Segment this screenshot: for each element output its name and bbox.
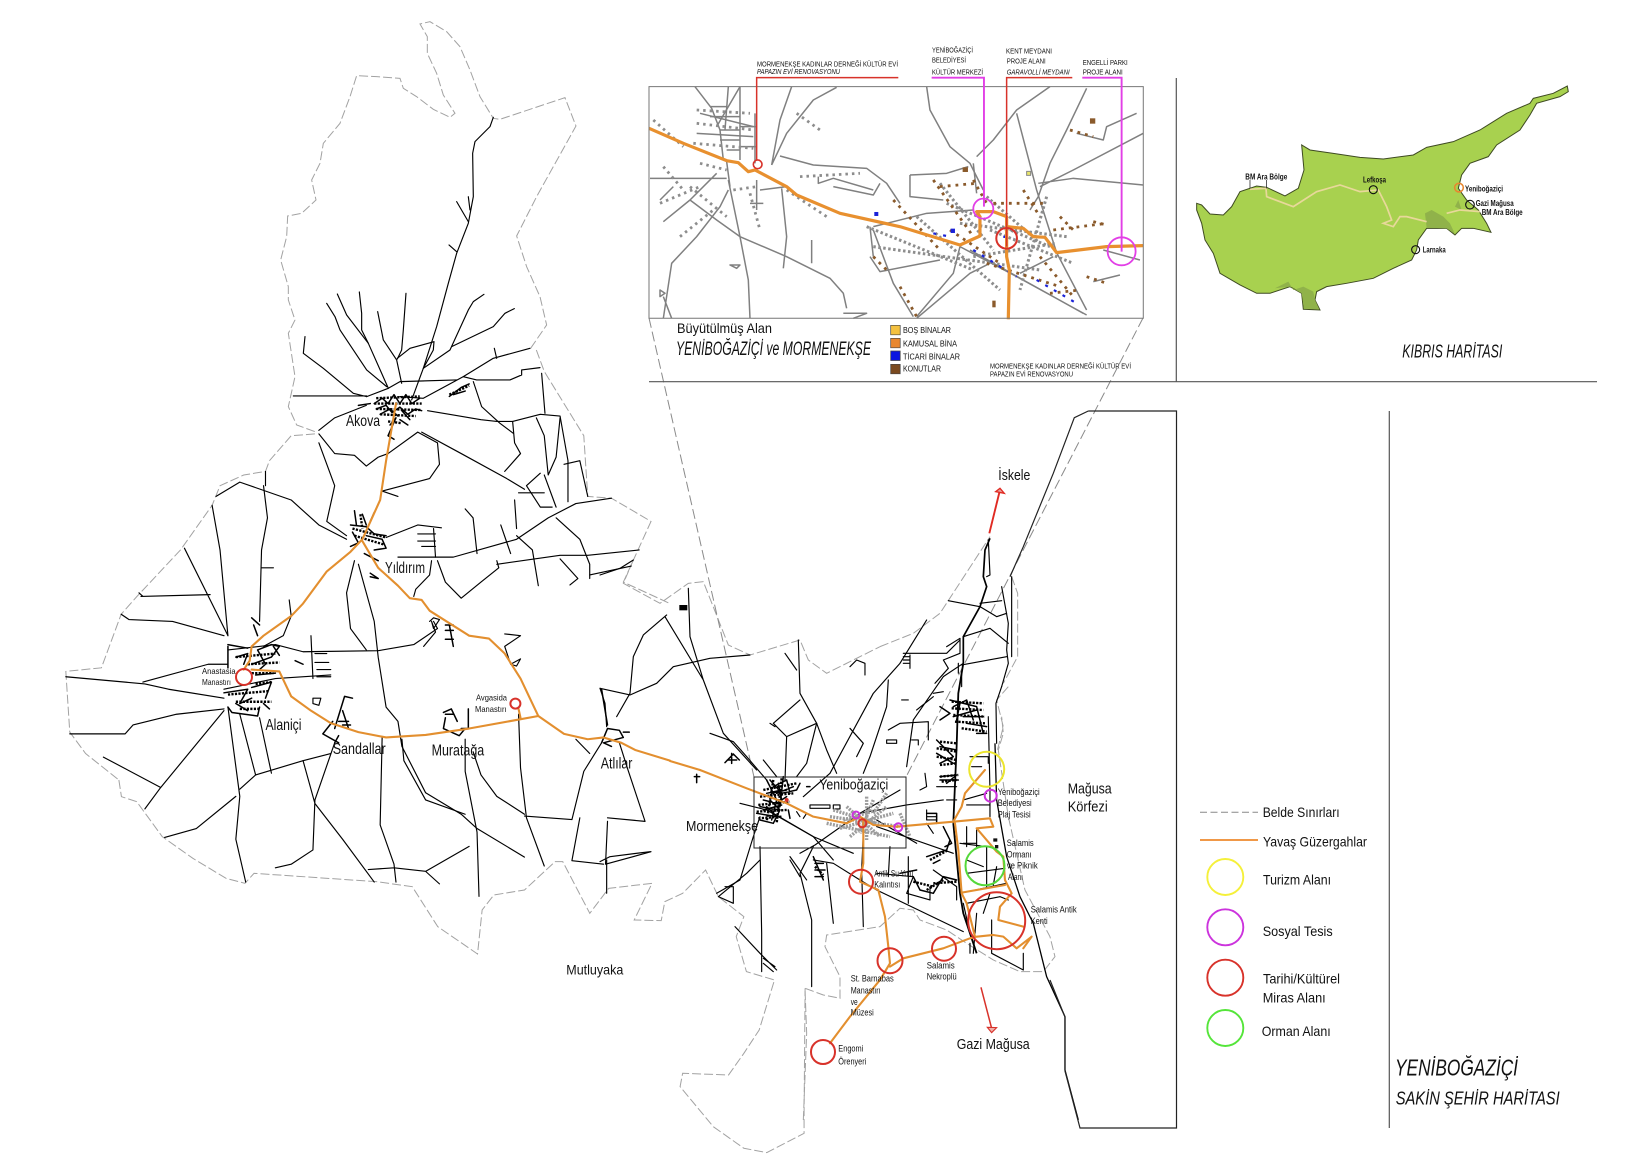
label: Akova: Akova — [346, 413, 380, 430]
label: St. Barnabas Manastırı ve Müzesi — [851, 974, 894, 1018]
inset caption: Kültür Merkezi: YENİBOĞAZİÇİ — [932, 46, 973, 55]
label: Mağusa Körfezi: Körfezi — [1068, 799, 1108, 816]
label: Yeniboğaziçi: Yeniboğaziçi — [819, 776, 888, 793]
village clusters: Akova, Yıldırım, Alaniçi, Sandallar, Muratağa, Atlılar — [224, 384, 629, 746]
inset frame — [649, 87, 1143, 318]
legend: Orman Alanı — [1207, 1010, 1331, 1046]
route link between Atlılar and Mormenekşe — [670, 761, 700, 770]
leader line: Kültür Merkezi — [932, 78, 993, 219]
label: Avgasida Manastırı: Avgasida — [476, 693, 507, 703]
label: Salamis Nekroplü: Salamis — [927, 960, 955, 970]
arrow: to İskele — [989, 488, 1004, 533]
label: Salamis Antik Kenti: Kenti — [1031, 916, 1048, 926]
label: Salamis Antik Kenti — [1031, 905, 1077, 926]
label: Anastasia Manastırı — [202, 666, 236, 687]
label: St. Barnabas Manastırı ve Müzesi: Manastırı — [851, 985, 881, 995]
label: Antik Su Yolu Kalıntısı: Kalıntısı — [874, 880, 900, 890]
label: Yeniboğaziçi Belediyesi Plaj Tesisi: Yeniboğaziçi — [998, 787, 1040, 797]
label: Salamis Nekroplü — [927, 960, 957, 981]
road network: Salamis and south-east — [700, 743, 1078, 1120]
British bases darker patches — [1275, 200, 1462, 309]
road network: north and Akova — [293, 117, 545, 433]
label: Salamis Nekroplü: Nekroplü — [927, 971, 957, 981]
title: Yeniboğaziçi Sakin Şehir Haritası: YENİBOĞAZİÇİ — [1395, 1055, 1518, 1081]
label: Salamis Ormanı ve Piknik Alanı: Salamis — [1007, 838, 1034, 848]
label: Mormenekşe: Mormenekşe — [686, 818, 758, 835]
inset caption: Engelli Parkı: PROJE ALANI — [1083, 67, 1123, 76]
legend: Belde Sınırları: Belde Sınırları — [1263, 804, 1340, 820]
inset caption: Papazın Evi — [757, 60, 898, 76]
label: St. Barnabas Manastırı ve Müzesi: Müzesi — [851, 1008, 874, 1018]
inset building footprints — [653, 110, 1107, 317]
inset caption: Engelli Parkı: ENGELLİ PARKI — [1083, 58, 1128, 67]
panel: main legend — [1200, 804, 1367, 1046]
label: Anastasia Manastırı: Manastırı — [202, 677, 231, 687]
inset caption: Papazın Evi: PAPAZIN EVİ RENOVASYONU — [757, 67, 841, 76]
heading: Kıbrıs Haritası: KIBRIS HARİTASI — [1402, 341, 1502, 361]
inset caption: Kültür Merkezi: BELEDİYESİ — [932, 56, 966, 65]
label: Atlılar: Atlılar — [601, 756, 633, 773]
label: Sandallar: Sandallar — [333, 741, 386, 758]
leader line: Engelli Parkı — [1082, 78, 1136, 265]
Cyprus label: Gazi Mağusa: Gazi Mağusa — [1476, 198, 1514, 208]
leader line: Kent Meydanı — [996, 78, 1072, 249]
label: Mutluyaka: Mutluyaka — [566, 962, 623, 978]
road network: central and coastal — [600, 560, 1002, 893]
UN buffer zone line — [1250, 185, 1480, 227]
legend: Tarihi/Kültürel Miras Alanı: Tarihi/Kültürel — [1263, 970, 1340, 986]
label: Anastasia Manastırı: Anastasia — [202, 666, 236, 676]
label: Engomi Örenyeri: Örenyeri — [838, 1056, 866, 1066]
label: Avgasida Manastırı — [475, 693, 507, 714]
inset caption: Kültür Merkezi: KÜLTÜR MERKEZİ — [932, 67, 983, 76]
arrow: to Gazi Mağusa — [981, 987, 997, 1033]
grey speckle of town centre — [827, 793, 910, 840]
label: Antik Su Yolu Kalıntısı — [874, 869, 913, 890]
label: Muratağa: Muratağa — [432, 742, 484, 759]
road network: west villages — [66, 384, 670, 896]
label: Avgasida Manastırı: Manastırı — [475, 704, 507, 714]
title: Yeniboğaziçi Sakin Şehir Haritası — [1395, 1055, 1560, 1108]
road network: İskele coast — [935, 538, 1012, 687]
inset building legend: KONUTLAR — [903, 365, 941, 374]
leader line: Papazın Evi — [753, 78, 898, 169]
label: Yeniboğaziçi Belediyesi Plaj Tesisi — [998, 787, 1040, 820]
inset footnote: MORMENEKŞE KADINLAR DERNEĞİ KÜLTÜR EVİ — [990, 362, 1131, 371]
inset caption: Papazın Evi: MORMENEKŞE KADINLAR DERNEĞİ KÜLTÜR EVİ — [757, 60, 898, 69]
label: Yıldırım: Yıldırım — [385, 560, 425, 577]
inset caption: Kent Meydanı — [1006, 46, 1070, 76]
Cyprus island shape — [1197, 86, 1568, 310]
slow routes: western loop — [244, 404, 670, 761]
projection lines from inset to main map rectangle — [649, 318, 1143, 777]
label: Salamis Ormanı ve Piknik Alanı: ve Piknik — [1007, 861, 1038, 871]
inset caption: Kent Meydanı: GARAVOLLİ MEYDANI — [1007, 67, 1070, 76]
legend: Sosyal Tesis: Sosyal Tesis — [1263, 923, 1333, 939]
inset marker buildings — [874, 118, 1095, 307]
inset heading: Büyütülmüş Alan: Büyütülmüş Alan — [677, 320, 772, 336]
Cyprus label: BM Ara Bölge east: BM Ara Bölge — [1482, 207, 1523, 217]
inset footnote — [990, 362, 1131, 379]
inset grey street network — [650, 87, 1143, 318]
label: Mağusa Körfezi: Mağusa — [1068, 780, 1112, 797]
inset footnote: PAPAZIN EVİ RENOVASYONU — [990, 370, 1073, 379]
Cyprus label: Lefkoşa: Lefkoşa — [1363, 175, 1386, 185]
panel: Cyprus map — [1197, 86, 1568, 310]
label: Yeniboğaziçi Belediyesi Plaj Tesisi: Belediyesi — [998, 798, 1032, 808]
inset building legend: KAMUSAL BİNA — [903, 340, 958, 349]
label: Gazi Mağusa: Gazi Mağusa — [957, 1036, 1030, 1053]
inset caption: Engelli Parkı — [1083, 58, 1128, 76]
inset building legend — [891, 325, 960, 374]
legend: Tarihi/Kültürel Miras Alanı: Miras Alanı — [1263, 989, 1326, 1005]
legend: Yavaş Güzergahlar: Yavaş Güzergahlar — [1263, 834, 1367, 850]
title: Yeniboğaziçi Sakin Şehir Haritası: SAKİN ŞEHİR HARİTASI — [1396, 1088, 1560, 1108]
label: Salamis Ormanı ve Piknik Alanı: Alanı — [1008, 872, 1023, 882]
municipal boundaries: dashed outline — [66, 22, 1055, 1153]
inset building legend: TİCARİ BİNALAR — [903, 352, 960, 361]
site circles on main map — [236, 669, 1025, 1064]
inset building legend: BOŞ BİNALAR — [903, 326, 951, 335]
label: Yeniboğaziçi Belediyesi Plaj Tesisi: Plaj Tesisi — [998, 810, 1031, 820]
Cyprus label: BM Ara Bölge west: BM Ara Bölge — [1245, 171, 1287, 181]
label: Alaniçi: Alaniçi — [266, 717, 302, 734]
enlarged area rectangle on main map — [754, 777, 906, 848]
Cyprus place markers — [1250, 180, 1474, 254]
village clusters: Mormenekşe and eastern shoreline — [694, 692, 990, 847]
label: Antik Su Yolu Kalıntısı: Antik Su Yolu — [874, 869, 913, 879]
inset heading: Yeniboğaziçi ve Mormenekşe: YENİBOĞAZİÇİ ve MORMENEKŞE — [676, 338, 871, 360]
label: Engomi Örenyeri: Engomi — [838, 1044, 863, 1054]
label: Salamis Ormanı ve Piknik Alanı — [1007, 838, 1038, 882]
label: Mağusa Körfezi — [1068, 780, 1112, 816]
label: Salamis Ormanı ve Piknik Alanı: Ormanı — [1007, 849, 1032, 859]
legend: Belde Sınırları — [1200, 804, 1340, 820]
slow routes: eastern network — [700, 770, 1032, 1043]
legend: Orman Alanı: Orman Alanı — [1262, 1023, 1331, 1039]
legend: Turizm Alanı — [1207, 859, 1331, 895]
inset slow route — [649, 128, 1143, 319]
Cyprus label: Yeniboğaziçi: Yeniboğaziçi — [1465, 184, 1503, 194]
legend: Turizm Alanı: Turizm Alanı — [1263, 872, 1331, 888]
inset caption: Kent Meydanı: PROJE ALANI — [1007, 56, 1046, 65]
label: St. Barnabas Manastırı ve Müzesi: St. Barnabas — [851, 974, 894, 984]
inset caption: Kültür Merkezi — [932, 46, 983, 76]
label: Salamis Antik Kenti: Salamis Antik — [1031, 905, 1077, 915]
Cyprus label: Larnaka: Larnaka — [1423, 245, 1446, 255]
label: İskele: İskele — [998, 466, 1030, 484]
label: St. Barnabas Manastırı ve Müzesi: ve — [851, 997, 858, 1007]
legend: Tarihi/Kültürel Miras Alanı — [1207, 960, 1340, 1005]
coast and gulf frame — [1010, 411, 1176, 1128]
panel dividers — [649, 78, 1597, 1128]
legend: Sosyal Tesis — [1207, 909, 1333, 945]
inset caption: Kent Meydanı: KENT MEYDANI — [1006, 46, 1052, 55]
label: Engomi Örenyeri — [838, 1044, 866, 1066]
panel: enlarged area inset map — [649, 78, 1143, 319]
